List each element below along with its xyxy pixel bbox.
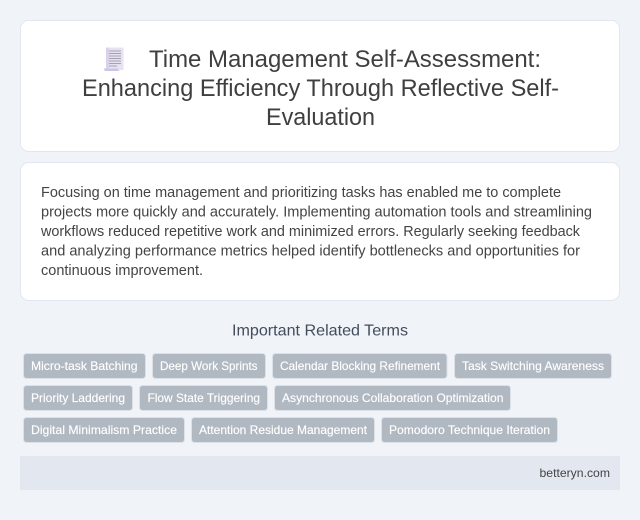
paragraph: continuous improvement. (41, 263, 203, 279)
footer (20, 456, 620, 490)
tag: attention residue management (192, 418, 374, 442)
tag: priority laddering (24, 386, 132, 410)
tag: calendar blocking refinement: Calendar Blocking Refinement (280, 359, 441, 373)
title: Time Management Self-Assessment: (149, 46, 541, 73)
tag: priority laddering: Priority Laddering (31, 391, 125, 405)
tag: attention residue management: Attention Residue Management (199, 423, 368, 437)
tag: flow state triggering: Flow State Triggering (148, 391, 260, 405)
tag: task switching awareness (454, 354, 612, 378)
tag: asynchronous collaboration optimization: Asynchronous Collaboration Optimization (282, 391, 504, 405)
tag: pomodoro technique iteration: Pomodoro Technique Iteration (389, 423, 550, 437)
tag: micro-task batching (24, 354, 146, 378)
title: Enhancing Efficiency Through Reflective Self- (82, 75, 559, 102)
tag: digital minimalism practice (24, 418, 184, 442)
heading: important related terms: Important Related Terms (232, 322, 408, 340)
tag: deep work sprints (152, 354, 266, 378)
footer: site name: betteryn.com (540, 466, 610, 480)
tag: flow state triggering (140, 386, 268, 410)
tag: calendar blocking refinement (272, 354, 447, 378)
tag: task switching awareness: Task Switching Awareness (462, 359, 604, 373)
tag: digital minimalism practice: Digital Minimalism Practice (31, 423, 177, 437)
title: Evaluation (266, 104, 375, 131)
icon: receipt (104, 48, 124, 71)
paragraph: workflows reduced repetitive work and minimized errors. Regularly seeking feedback (40, 224, 581, 240)
paragraph: and analyzing performance metrics helped identify bottlenecks and opportunities for (41, 244, 580, 260)
title (82, 46, 559, 131)
panel: title card (20, 20, 620, 152)
tag: asynchronous collaboration optimization (274, 386, 510, 410)
paragraph: projects more quickly and accurately. Implementing automation tools and streamlining (41, 204, 592, 220)
tags (24, 354, 612, 442)
tag: deep work sprints: Deep Work Sprints (160, 359, 258, 373)
tag: micro-task batching: Micro-task Batching (31, 359, 138, 373)
tag: pomodoro technique iteration (382, 418, 558, 442)
paragraph: Focusing on time management and prioritizing tasks has enabled me to complete (41, 185, 561, 201)
panel: summary text (20, 162, 620, 300)
paragraph (40, 185, 592, 279)
